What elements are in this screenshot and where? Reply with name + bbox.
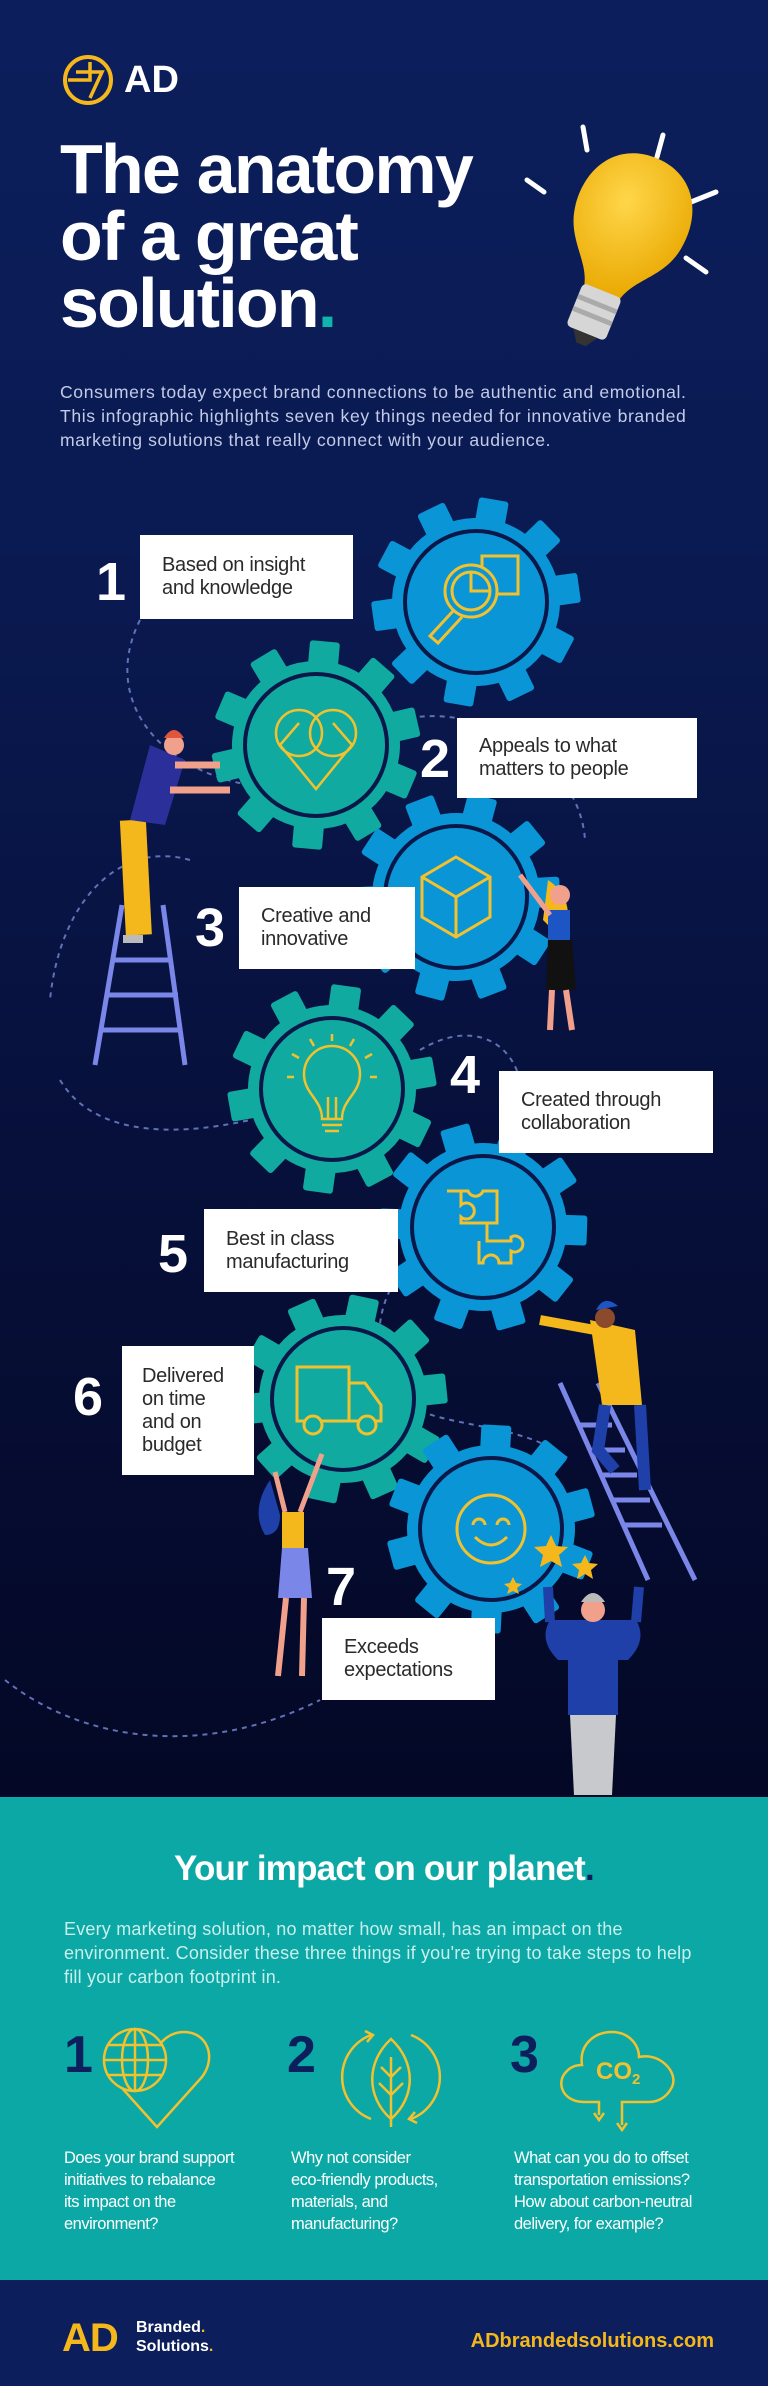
dark hero background (0, 0, 768, 1797)
title (60, 130, 474, 342)
ladder right (560, 1383, 695, 1580)
footer logo (62, 2316, 213, 2360)
step 7: expectations (344, 1659, 453, 1681)
step 5: manufacturing (226, 1250, 349, 1272)
heading: Your impact on our planet. (174, 1849, 594, 1888)
item 1: environment? (64, 2215, 158, 2233)
gear 2: heart (204, 632, 428, 858)
step 4 (450, 1045, 713, 1153)
item 3 (510, 2026, 692, 2233)
step 4: collaboration (521, 1112, 631, 1134)
logo: AD: AD (124, 59, 179, 101)
intro paragraph (60, 382, 686, 450)
intro text: environment. Consider these three things if you're trying to take steps to help (64, 1943, 692, 1963)
woman right top (520, 875, 576, 1030)
step 1: 1 (96, 552, 126, 612)
title: The anatomy (60, 130, 472, 208)
step 3: innovative (261, 928, 348, 950)
step 1 (96, 535, 353, 619)
people and ladders (92, 730, 698, 1795)
gear shapes (212, 498, 598, 1634)
logo: AD (63, 55, 179, 105)
man right (540, 1301, 645, 1490)
step 5 (158, 1209, 398, 1292)
title: of a great (60, 197, 357, 275)
gear 3: cube (329, 770, 583, 1024)
item 2: Why not consider (291, 2149, 410, 2167)
step 3 (195, 887, 415, 969)
man left (120, 730, 230, 943)
step 4: Created through (521, 1089, 661, 1111)
step 5: Best in class (226, 1228, 334, 1250)
item 1: 1 (64, 2026, 93, 2084)
panel: impact on planet (0, 1797, 768, 2280)
step 6 (73, 1346, 254, 1475)
gear 5: puzzle (350, 1094, 616, 1360)
step 1: Based on insight (162, 554, 305, 576)
gear 1: insight (356, 482, 596, 722)
item 3: How about carbon-neutral (514, 2193, 692, 2211)
woman left bottom (259, 1454, 322, 1676)
item 2: 2 (287, 2026, 316, 2084)
item 2: manufacturing? (291, 2215, 398, 2233)
dashed connector paths (4, 620, 586, 1738)
ladder left (95, 905, 185, 1065)
step 4: 4 (450, 1045, 480, 1105)
footer logo: Branded. (136, 2319, 205, 2336)
step 6: 6 (73, 1367, 103, 1427)
item 3: transportation emissions? (514, 2171, 690, 2189)
item 3: delivery, for example? (514, 2215, 663, 2233)
intro paragraph: This infographic highlights seven key things needed for innovative branded (60, 406, 686, 426)
website: ADbrandedsolutions.com (471, 2330, 714, 2352)
step 6: and on (142, 1410, 201, 1432)
item 1: its impact on the (64, 2193, 176, 2211)
item 1 (64, 2026, 234, 2233)
step 1: and knowledge (162, 577, 293, 599)
gear 7: smile (382, 1420, 600, 1638)
step 5: 5 (158, 1224, 188, 1284)
item 3: What can you do to offset (514, 2149, 688, 2167)
item 3: CO (596, 2058, 632, 2085)
step 3: 3 (195, 898, 225, 958)
item 2: eco-friendly products, (291, 2171, 438, 2189)
step 7: 7 (326, 1557, 356, 1617)
item 1: Does your brand support (64, 2149, 234, 2167)
gear 6: truck (220, 1276, 466, 1522)
intro text: Every marketing solution, no matter how small, has an impact on the (64, 1919, 623, 1939)
step 6: budget (142, 1434, 201, 1456)
step 2: Appeals to what (479, 735, 617, 757)
intro paragraph: marketing solutions that really connect with your audience. (60, 430, 551, 450)
footer (0, 2280, 768, 2386)
item 2 (287, 2026, 442, 2233)
item 3: 3 (510, 2026, 539, 2084)
intro text (64, 1919, 692, 1987)
footer logo: Solutions. (136, 2338, 213, 2355)
item 2: materials, and (291, 2193, 388, 2211)
step 2: 2 (420, 729, 450, 789)
intro text: fill your carbon footprint in. (64, 1967, 281, 1987)
step 7 (322, 1557, 495, 1700)
item 1: initiatives to rebalance (64, 2171, 215, 2189)
footer logo: AD (62, 2316, 118, 2360)
step 6: Delivered (142, 1364, 224, 1386)
step 6: on time (142, 1388, 206, 1410)
gear 4: bulb (215, 972, 449, 1206)
intro paragraph: Consumers today expect brand connections to be authentic and emotional. (60, 382, 686, 402)
title: solution. (60, 264, 335, 342)
step 3: Creative and (261, 905, 371, 927)
item 3: 2 (632, 2071, 640, 2088)
step 7: Exceeds (344, 1636, 419, 1658)
man bottom (546, 1587, 640, 1795)
step 2 (420, 718, 697, 798)
icon: lightbulb (524, 124, 718, 346)
step 2: matters to people (479, 758, 628, 780)
